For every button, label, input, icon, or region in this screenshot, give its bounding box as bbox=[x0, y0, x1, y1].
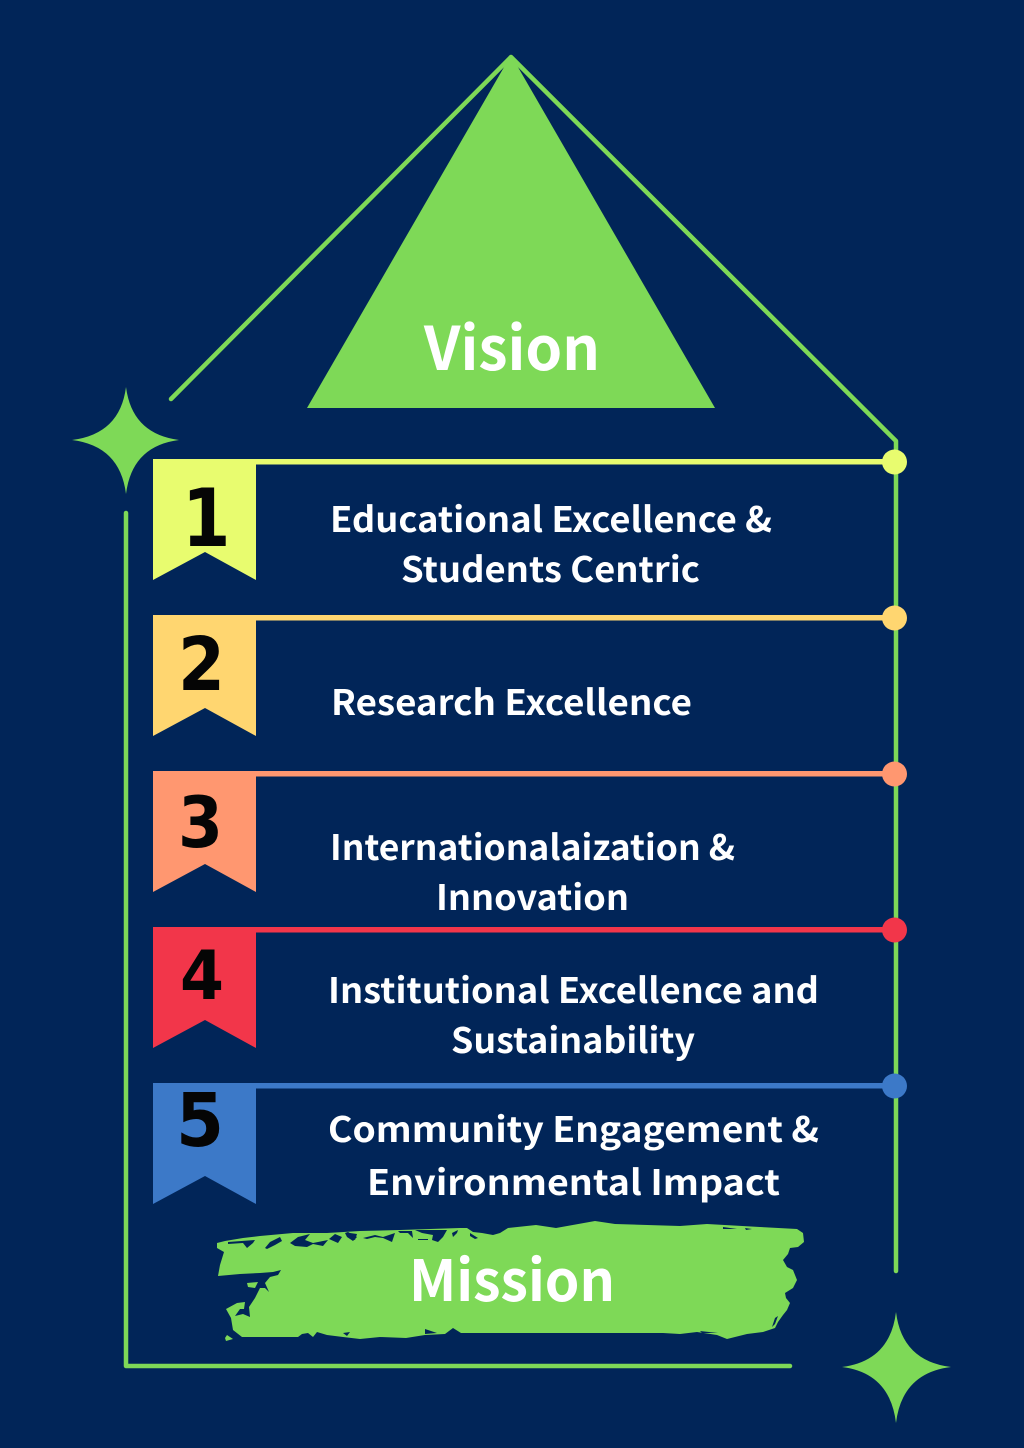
dot 1 bbox=[882, 450, 907, 474]
dot 5 bbox=[882, 1074, 907, 1098]
item 3 text bbox=[330, 820, 735, 921]
dot 4 bbox=[882, 918, 907, 942]
item 5 bbox=[153, 1074, 907, 1206]
vision label: Vision bbox=[423, 301, 600, 388]
item 1 bbox=[153, 450, 907, 593]
item 1 text: Students Centric bbox=[401, 542, 700, 593]
item 3 text: Innovation bbox=[436, 870, 629, 921]
item 5 text: Environmental Impact bbox=[367, 1155, 780, 1206]
ribbon 1 bbox=[153, 459, 256, 580]
item 2 text: Research Excellence bbox=[331, 675, 692, 726]
line 1 bbox=[153, 459, 894, 464]
number 2: 2 bbox=[178, 622, 225, 708]
ribbon 4 bbox=[153, 927, 256, 1048]
line 4 bbox=[153, 927, 894, 932]
number 4: 4 bbox=[180, 937, 224, 1016]
dot 2 bbox=[882, 606, 907, 630]
mission brush stroke banner bbox=[217, 1221, 804, 1341]
line 2 bbox=[153, 615, 894, 620]
item 1 text: Educational Excellence & bbox=[330, 492, 772, 543]
outline: left wall and floor bbox=[126, 513, 790, 1366]
item 3 bbox=[153, 762, 907, 921]
item 2 bbox=[153, 606, 907, 736]
line 5 bbox=[153, 1083, 894, 1088]
item 5 text: Community Engagement & bbox=[328, 1102, 819, 1153]
vision triangle bbox=[307, 55, 715, 408]
item 4 text bbox=[328, 963, 819, 1064]
ribbon 5 bbox=[153, 1083, 256, 1204]
item 5 text bbox=[328, 1102, 819, 1206]
number 1: 1 bbox=[182, 472, 230, 565]
dot 3 bbox=[882, 762, 907, 786]
mission label: Mission bbox=[409, 1236, 615, 1318]
item 4 bbox=[153, 918, 907, 1064]
item 1 text bbox=[330, 492, 772, 593]
item 4 text: Institutional Excellence and bbox=[328, 963, 819, 1014]
line 3 bbox=[153, 771, 894, 776]
outline: roof and right wall bbox=[171, 57, 896, 1271]
icon: sparkle star bottom right bbox=[842, 1312, 951, 1423]
item 4 text: Sustainability bbox=[451, 1013, 695, 1064]
ribbon 2 bbox=[153, 615, 256, 736]
ribbon 3 bbox=[153, 771, 256, 892]
icon: sparkle star top left bbox=[72, 387, 179, 494]
item 3 text: Internationalaization & bbox=[330, 820, 735, 871]
number 3: 3 bbox=[178, 782, 223, 864]
number 5: 5 bbox=[176, 1078, 224, 1164]
